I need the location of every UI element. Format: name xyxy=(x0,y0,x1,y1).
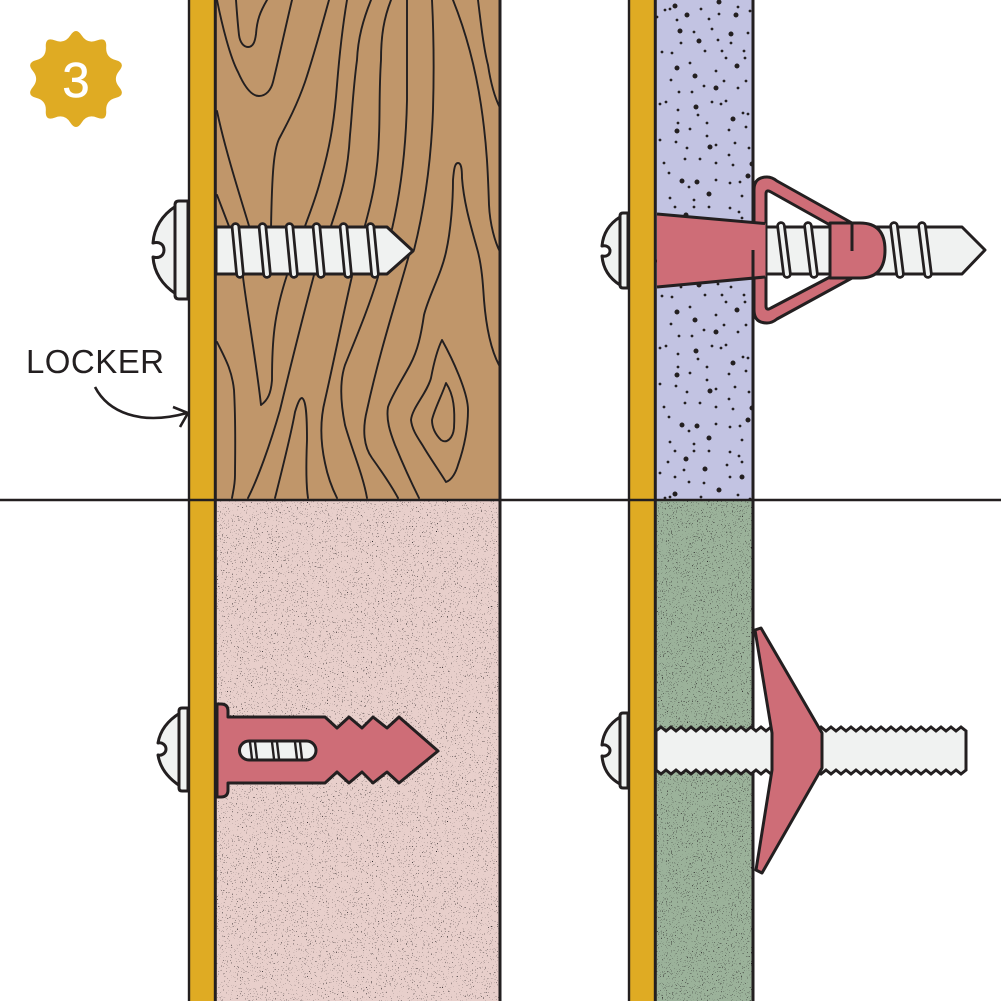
panel: green drywall xyxy=(656,500,753,1001)
anchor sleeve xyxy=(657,214,766,287)
screw shaft xyxy=(216,227,413,274)
screw threads xyxy=(236,227,375,274)
anchor in foam wall xyxy=(602,177,985,323)
arrow: locker pointer xyxy=(95,387,188,427)
screw head xyxy=(602,713,628,788)
panel edge lines xyxy=(500,0,753,1001)
anchor cap xyxy=(830,223,885,278)
toggle bolt in drywall xyxy=(602,628,966,873)
cap notch xyxy=(850,223,854,251)
screw threads xyxy=(781,226,928,274)
badge: step number 3: 3 xyxy=(62,54,90,108)
locker panel right xyxy=(629,0,655,1001)
screw head xyxy=(158,708,188,791)
toggle triangle frame xyxy=(754,177,852,323)
plug anchor in plaster xyxy=(158,704,438,797)
badge: step number 3 xyxy=(30,31,122,127)
plug slot with screw xyxy=(240,741,316,760)
sleeve edges xyxy=(657,214,765,287)
threaded bolt xyxy=(656,727,966,774)
screw head xyxy=(153,201,188,299)
label: LOCKER: LOCKER xyxy=(26,343,164,380)
screw head xyxy=(602,213,628,288)
speckle texture xyxy=(216,500,500,1001)
plug body xyxy=(217,704,438,797)
screw shaft xyxy=(766,227,985,274)
foam dots xyxy=(656,0,752,499)
locker panel left xyxy=(189,0,215,1001)
screw in wood xyxy=(153,201,413,299)
spring wing xyxy=(755,628,822,873)
panel: pink plaster wall xyxy=(216,500,500,1001)
triangle opening xyxy=(766,191,830,309)
panel: purple foam wall xyxy=(656,0,752,499)
panel: wood wall xyxy=(216,0,500,500)
slot threads xyxy=(250,742,302,759)
divider line xyxy=(0,499,1001,501)
wood grain lines xyxy=(217,0,500,498)
speckle texture xyxy=(656,500,753,1001)
